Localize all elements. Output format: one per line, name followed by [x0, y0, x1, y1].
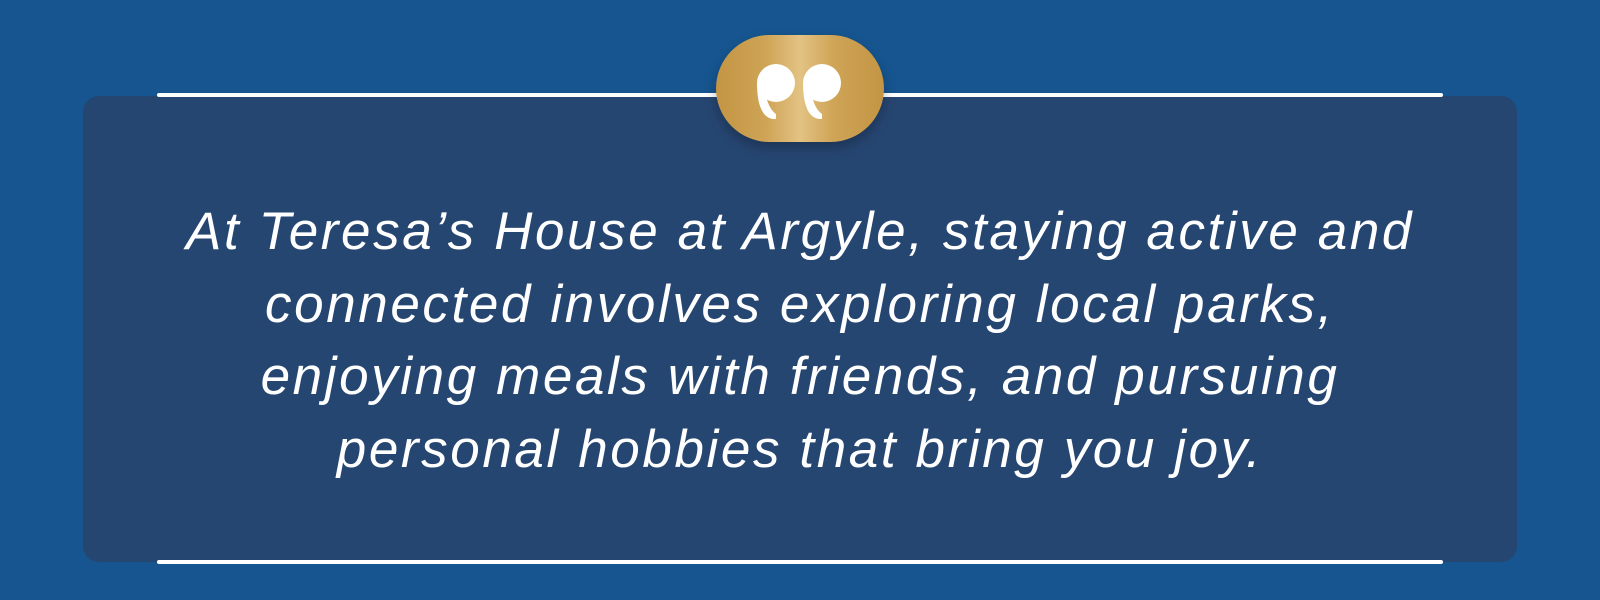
- text block: quote: [183, 202, 1414, 478]
- icon: gold quote badge: [716, 35, 884, 142]
- text block: quote: connected involves exploring local parks,: [265, 274, 1335, 334]
- text block: quote: personal hobbies that bring you joy.: [337, 420, 1263, 478]
- text block: quote: enjoying meals with friends, and pursuing: [261, 347, 1339, 406]
- text block: quote: At Teresa’s House at Argyle, staying active and: [186, 202, 1414, 261]
- panel: quote card: [83, 96, 1517, 562]
